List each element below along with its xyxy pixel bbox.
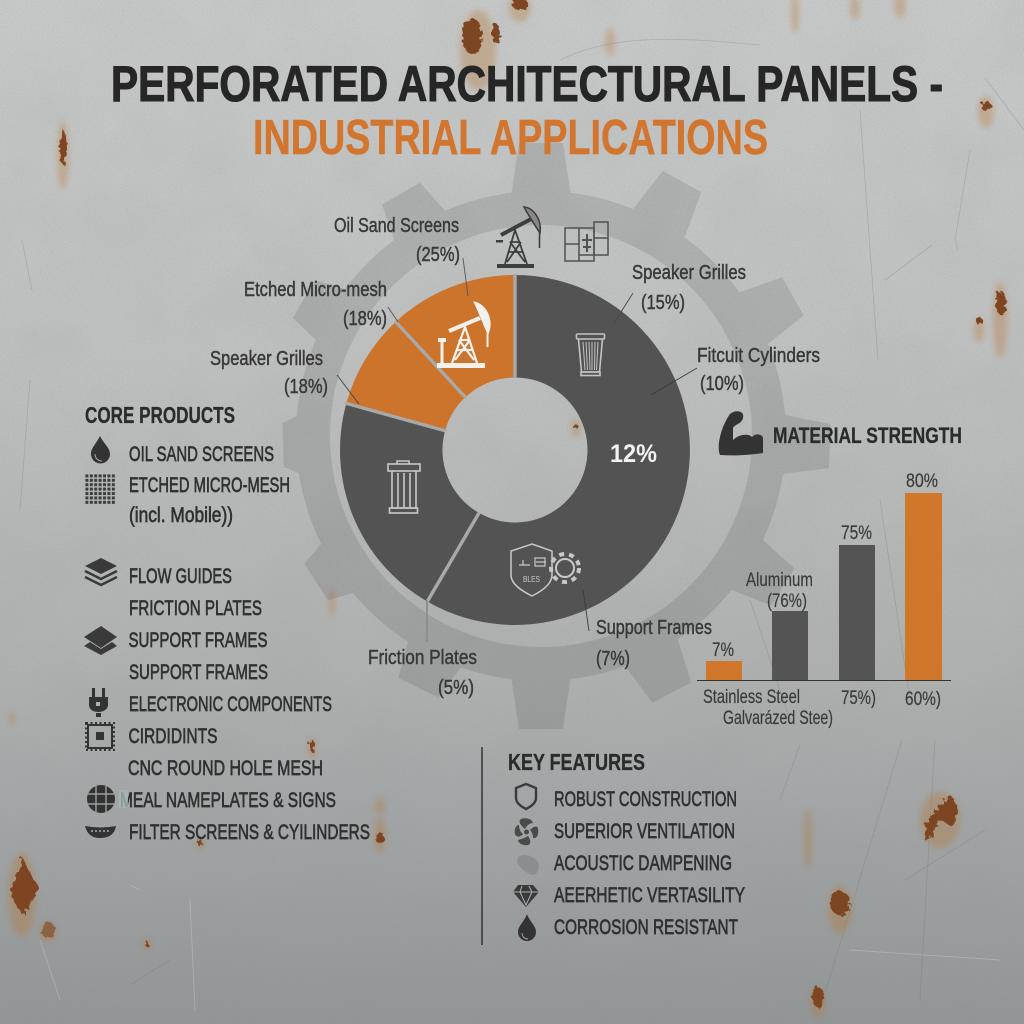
icon: oil drop xyxy=(91,436,110,464)
icon: gem xyxy=(513,885,539,907)
title: INDUSTRIAL APPLICATIONS xyxy=(253,111,768,165)
bar value labels: Aluminum xyxy=(746,570,813,591)
icon: acoustic blob xyxy=(517,855,539,875)
text: support frames repeat: SUPPORT FRAMES xyxy=(129,661,268,684)
bar value labels: Stainless Steel xyxy=(703,687,800,708)
text: robust construction: ROBUST CONSTRUCTION xyxy=(554,788,737,811)
label: oil sand screens xyxy=(334,215,468,296)
icon: filter bin left xyxy=(388,461,420,513)
panel: material strength bar chart xyxy=(697,411,962,729)
bar value labels: 80% xyxy=(906,471,938,492)
panel: key features xyxy=(482,747,745,945)
divider line xyxy=(481,747,483,945)
label: etched micro-mesh: Etched Micro-mesh xyxy=(244,279,387,301)
axis xyxy=(697,680,951,682)
text: cnc round hole mesh: CNC ROUND HOLE MESH xyxy=(128,757,323,780)
icon: mesh globe xyxy=(87,785,115,813)
chart labels and leader lines xyxy=(210,215,820,699)
label: etched micro-mesh: (18%) xyxy=(343,308,387,330)
label: speaker grilles left: Speaker Grilles xyxy=(210,348,323,370)
bar value labels: 75% xyxy=(841,523,872,544)
icon: plug xyxy=(89,688,108,717)
text: aesthetic versatility: AEERHETIC VERTASILITY xyxy=(554,884,745,907)
label: oil sand screens: (25%) xyxy=(416,244,460,266)
label: friction plates: Friction Plates xyxy=(368,647,477,669)
text: support frames: SUPPORT FRAMES xyxy=(128,629,268,652)
text: corrosion resistant: CORROSION RESISTANT xyxy=(554,916,738,939)
label: etched micro-mesh xyxy=(244,279,398,330)
text: friction plates: FRICTION PLATES xyxy=(129,597,262,620)
text: acoustic dampening: ACOUSTIC DAMPENING xyxy=(554,852,732,875)
icon: shield and gear: BLES xyxy=(523,575,540,584)
center value: 12% xyxy=(610,440,657,468)
bar value labels: 75%) xyxy=(841,688,876,709)
text: etched micro-mesh: ETCHED MICRO-MESH xyxy=(129,474,290,497)
label: speaker grilles right: Speaker Grilles xyxy=(632,262,746,284)
text: superior ventilation: SUPERIOR VENTILATION xyxy=(554,820,735,843)
heading: core products: CORE PRODUCTS xyxy=(85,402,235,428)
title xyxy=(111,56,943,165)
icon: fan xyxy=(515,818,538,845)
label: fitcuit cylinders xyxy=(651,345,820,395)
label: oil sand screens: Oil Sand Screens xyxy=(334,215,459,237)
label: friction plates: (5%) xyxy=(438,677,474,699)
icon: white pump jack xyxy=(437,302,490,368)
label: support frames: Support Frames xyxy=(596,617,712,639)
bar value labels: 60%) xyxy=(905,689,941,710)
icon: perforated panel grid xyxy=(565,222,608,261)
text: electronic components: ELECTRONIC COMPONENTS xyxy=(129,693,332,716)
text: cirdidints: CIRDIDINTS xyxy=(128,725,218,748)
icon: shield and gear xyxy=(511,544,579,596)
donut chart xyxy=(340,274,690,625)
icon: dark pump jack above chart xyxy=(496,207,540,268)
label: support frames xyxy=(583,590,712,670)
bars xyxy=(706,493,942,680)
icon: water drop xyxy=(518,914,536,941)
segment: left dark xyxy=(340,403,479,602)
bar value labels: (76%) xyxy=(767,591,807,612)
segment: upper orange xyxy=(396,275,515,397)
text: metal nameplates: MEAL NAMEPLATES & SIGNS xyxy=(120,789,336,812)
label: friction plates xyxy=(368,600,477,699)
text: oil sand screens: OIL SAND SCREENS xyxy=(129,443,274,466)
icon: micro mesh dots xyxy=(85,474,116,504)
label: speaker grilles left xyxy=(210,348,359,404)
label: fitcuit cylinders: (10%) xyxy=(700,373,744,395)
background gear watermark xyxy=(282,143,831,729)
bar value labels: Galvarázed Stee) xyxy=(723,708,833,729)
text: incl mobile: (incl. Mobile)) xyxy=(129,504,233,527)
icon: circuit chip xyxy=(86,723,114,750)
heading: key features: KEY FEATURES xyxy=(508,749,645,775)
label: support frames: (7%) xyxy=(596,648,630,670)
icon: flexed arm xyxy=(719,411,763,455)
icon: bowl strainer xyxy=(85,826,116,838)
icon: shield xyxy=(516,784,536,809)
text: flow guides: FLOW GUIDES xyxy=(129,565,232,588)
icon: filter bin upper right xyxy=(576,334,604,376)
icon: double layer xyxy=(84,626,117,655)
label: speaker grilles right xyxy=(614,262,746,323)
label: fitcuit cylinders: Fitcuit Cylinders xyxy=(697,345,820,367)
icon: layered stack xyxy=(85,558,117,585)
panel: core products xyxy=(84,402,370,844)
bar value labels: 7% xyxy=(712,640,734,661)
segment: lower orange xyxy=(346,322,466,431)
label: speaker grilles right: (15%) xyxy=(641,292,685,314)
segment: large dark xyxy=(428,275,690,625)
bar value labels xyxy=(703,471,941,729)
heading: material strength: MATERIAL STRENGTH xyxy=(773,423,962,448)
label: speaker grilles left: (18%) xyxy=(284,376,328,398)
text: filter screens: FILTER SCREENS & CYILINDERS xyxy=(129,821,370,844)
